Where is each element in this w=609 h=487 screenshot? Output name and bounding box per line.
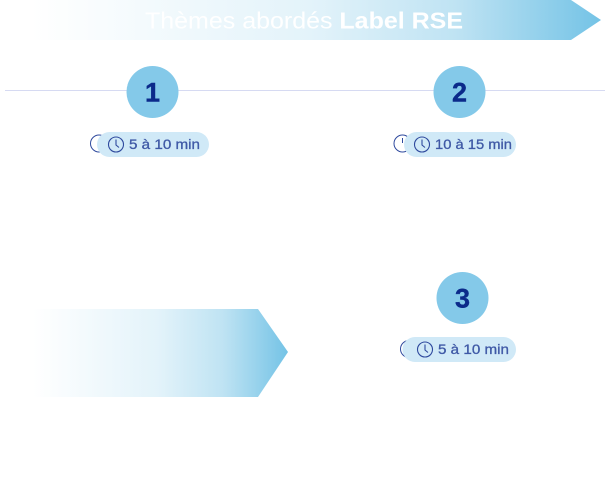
empty arrow banner xyxy=(28,309,288,397)
icon: clock xyxy=(414,137,430,152)
duration badge 1: 5 à 10 min xyxy=(129,137,200,152)
number circle 2: 2 xyxy=(452,78,467,108)
title banner xyxy=(20,0,601,40)
icon: clock xyxy=(418,342,432,357)
duration badge 2: 10 à 15 min xyxy=(435,137,512,152)
step 2 xyxy=(394,66,516,157)
number circle 1: 1 xyxy=(145,78,160,108)
number circle 3: 3 xyxy=(455,284,470,314)
step 3 xyxy=(400,272,516,362)
icon: clock xyxy=(108,137,124,152)
step 1 xyxy=(90,66,209,157)
duration badge 3: 5 à 10 min xyxy=(438,342,509,357)
title: Thèmes abordés Label RSE xyxy=(145,8,463,34)
